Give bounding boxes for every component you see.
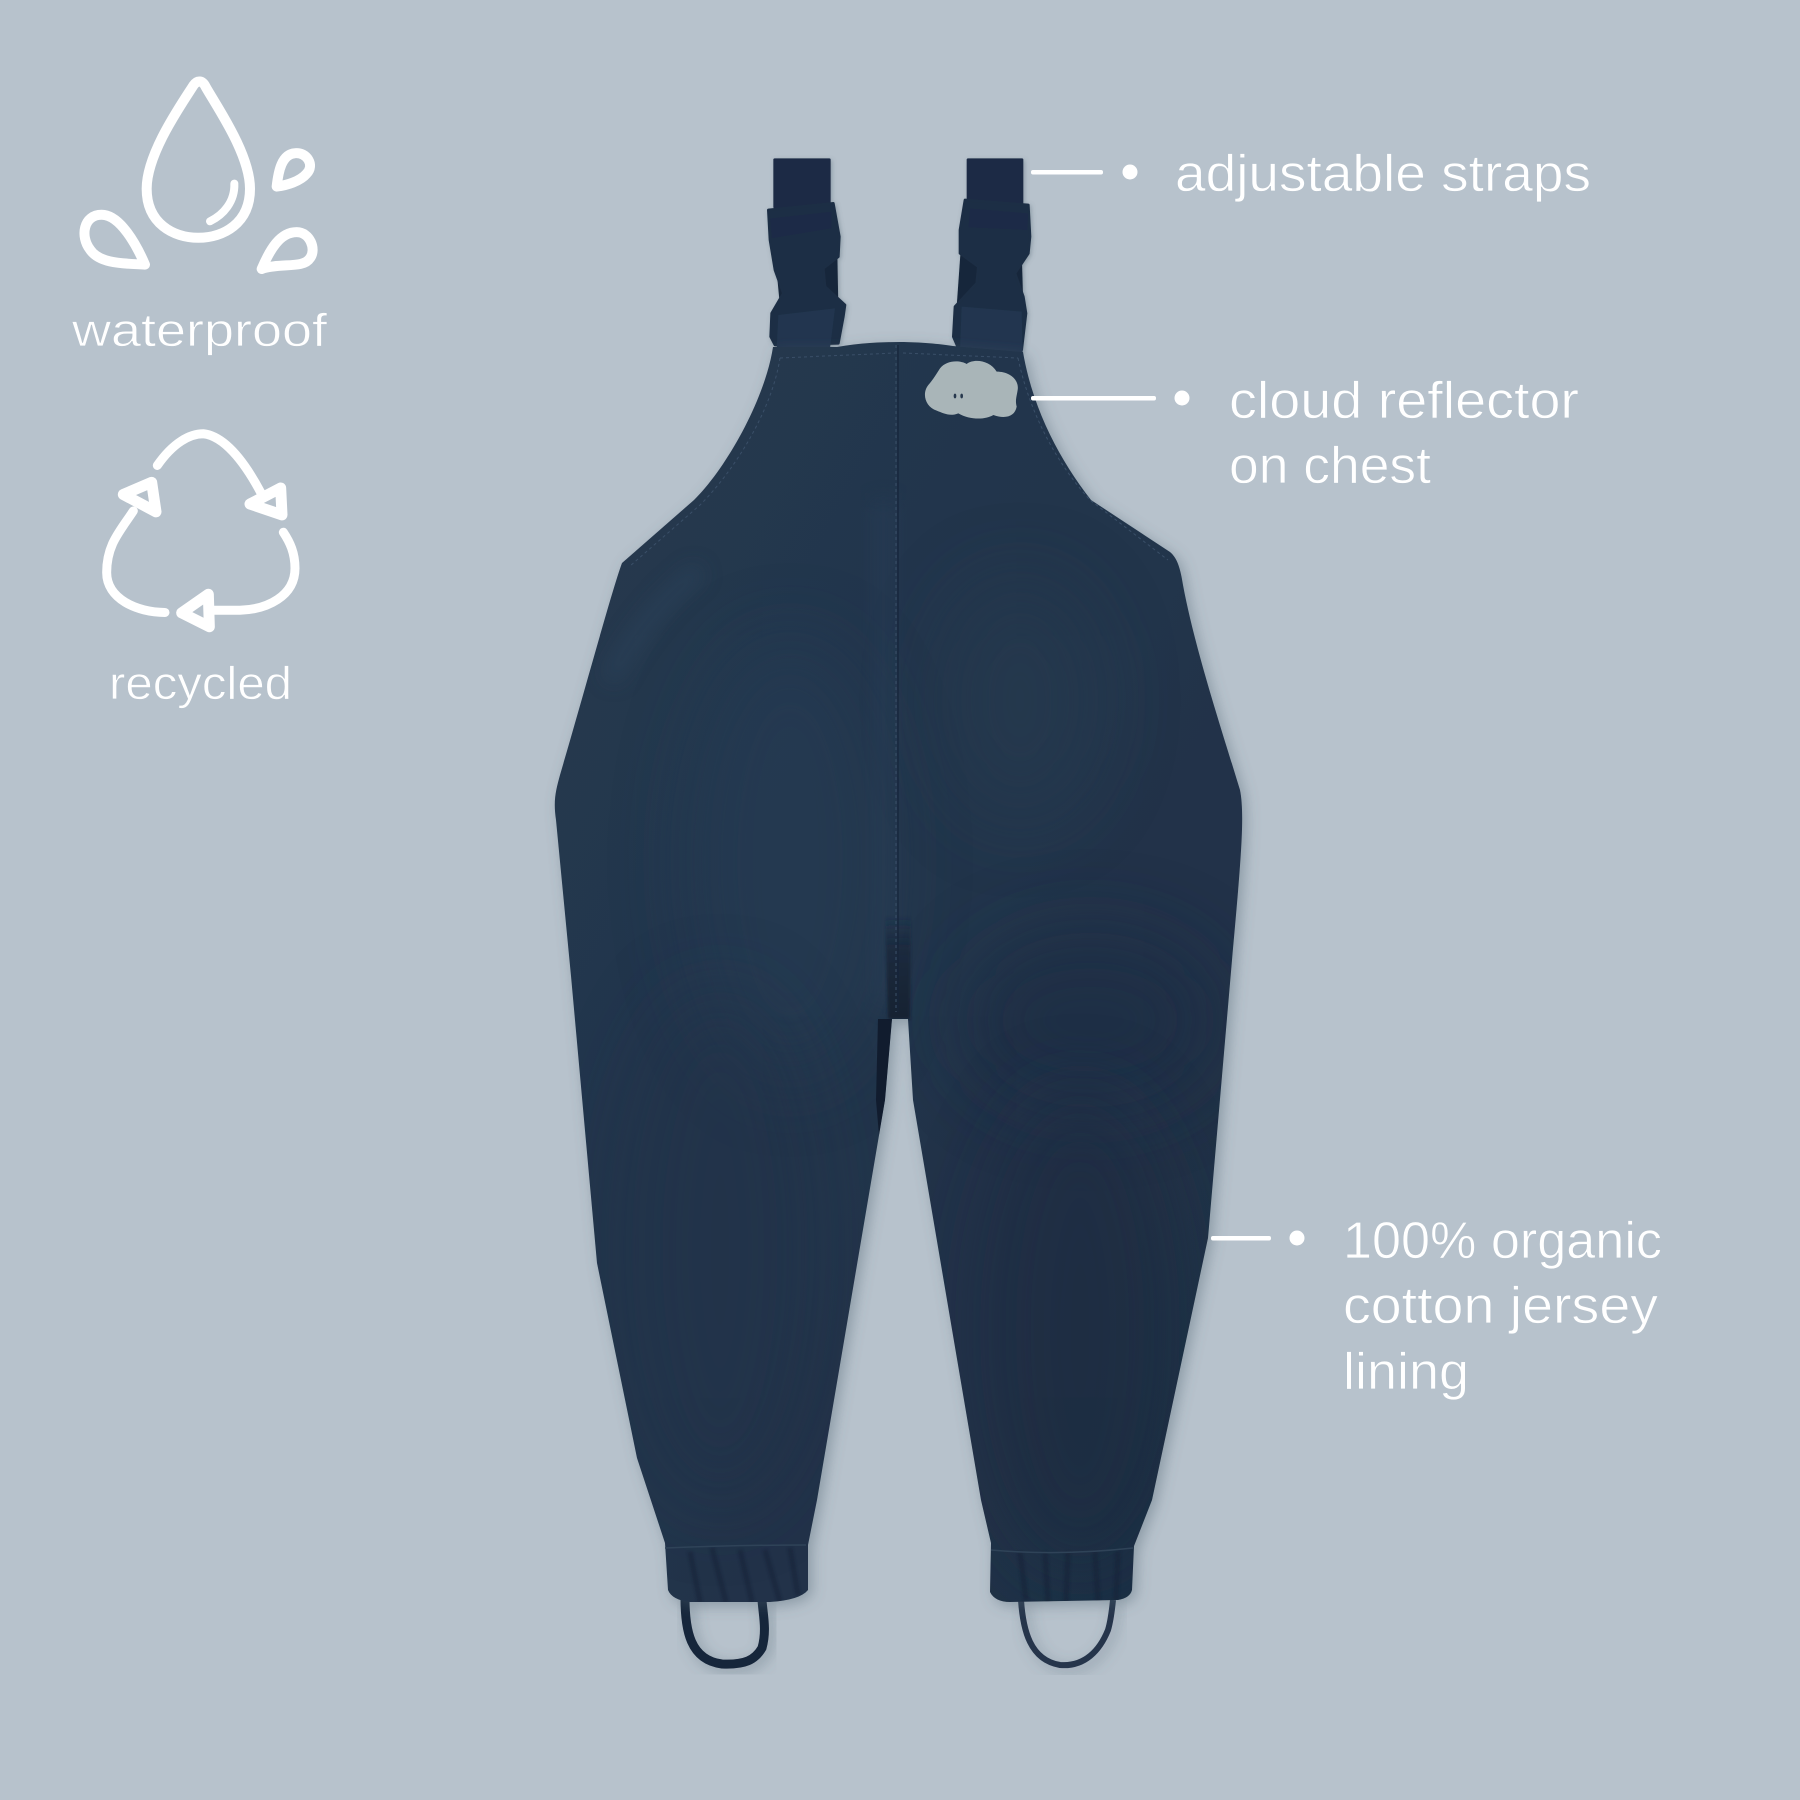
ankle cuff seam left bbox=[665, 1545, 806, 1548]
strap hardware left bbox=[768, 158, 845, 348]
callout: cloud reflector: on chest bbox=[1229, 437, 1432, 495]
callout: organic cotton lining: 100% organic bbox=[1343, 1212, 1662, 1270]
label: recycled: recycled bbox=[109, 657, 292, 709]
foot strap left bbox=[685, 1598, 764, 1664]
stitching bbox=[630, 345, 1168, 1012]
icon: water drops bbox=[84, 81, 313, 269]
infographic canvas bbox=[72, 76, 1660, 1675]
dungaree body bbox=[555, 342, 1242, 1602]
placket seam bbox=[897, 345, 899, 1012]
callout: cloud reflector bbox=[1031, 372, 1579, 495]
strap hardware right bbox=[953, 158, 1030, 353]
garment: navy waterproof dungarees bbox=[555, 158, 1242, 1665]
foot strap right bbox=[1021, 1600, 1113, 1665]
callout: adjustable straps: adjustable straps bbox=[1175, 145, 1591, 203]
callout: organic cotton lining bbox=[1211, 1212, 1662, 1401]
ankle cuff seam right bbox=[991, 1548, 1133, 1553]
callout: organic cotton lining: cotton jersey bbox=[1343, 1277, 1658, 1335]
fabric shading bbox=[688, 926, 1227, 1602]
cloud reflector patch bbox=[925, 361, 1018, 419]
icon: recycling arrows bbox=[107, 434, 295, 627]
callout: organic cotton lining: lining bbox=[1343, 1343, 1469, 1401]
callout: cloud reflector: cloud reflector bbox=[1229, 372, 1579, 430]
label: waterproof: waterproof bbox=[71, 304, 327, 356]
